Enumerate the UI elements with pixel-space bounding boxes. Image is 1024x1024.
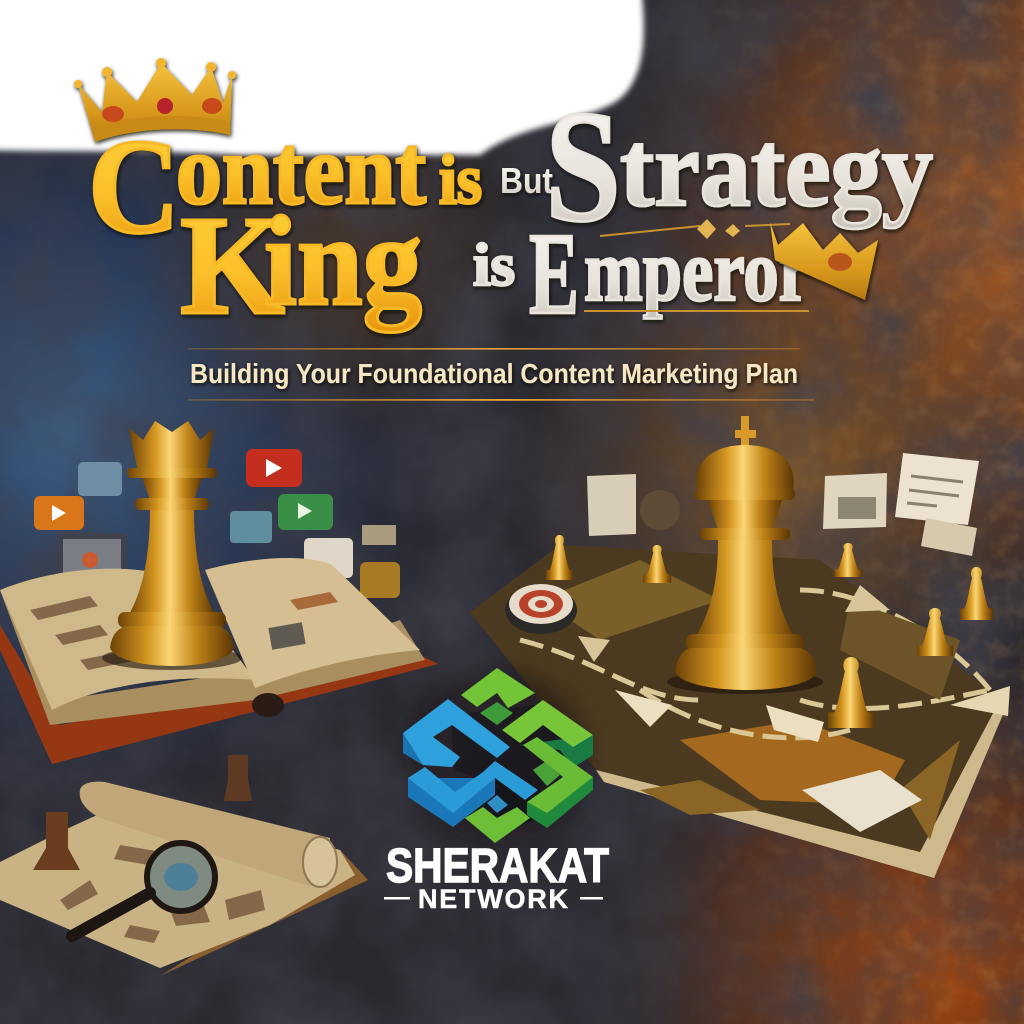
title: content is king [88, 112, 482, 344]
strategy map [470, 545, 1010, 878]
chess king: strategy [667, 416, 823, 694]
title: content is king: C [88, 112, 180, 262]
strategy documents [587, 453, 979, 556]
target token [505, 584, 577, 634]
crown: king [74, 58, 236, 142]
title: but strategy is emperor [473, 77, 933, 339]
crown: emperor [770, 222, 878, 300]
title: content is king: ontent [176, 114, 426, 225]
title: but strategy is emperor: trategy [620, 110, 933, 229]
logo: blue [403, 699, 538, 827]
logo: green bottom [465, 807, 530, 843]
title: but strategy is emperor: is [473, 232, 515, 298]
title: but strategy is emperor: mperor [584, 223, 810, 320]
scroll and papers [0, 755, 368, 976]
ornament [584, 219, 809, 312]
title: content is king: K [180, 186, 285, 344]
subtitle: Building Your Foundational Content Marketing Plan [190, 358, 798, 389]
logo: sherakat network [403, 668, 593, 844]
title: content is king: is [439, 142, 482, 219]
title: but strategy is emperor: E [529, 208, 579, 339]
logo: green top [461, 668, 535, 725]
white blank corner [0, 0, 644, 155]
chess queen: content [102, 421, 242, 670]
title: but strategy is emperor: S [545, 77, 621, 255]
logo wordmark [384, 840, 609, 914]
logo: green right [502, 700, 593, 828]
logo wordmark: NETWORK [418, 884, 568, 914]
media icons [34, 449, 400, 598]
title: content is king: ing [264, 190, 422, 332]
title: but strategy is emperor: But [500, 160, 553, 201]
small gold pawns [546, 535, 993, 728]
logo wordmark: SHERAKAT [386, 840, 609, 893]
open book [0, 558, 438, 764]
